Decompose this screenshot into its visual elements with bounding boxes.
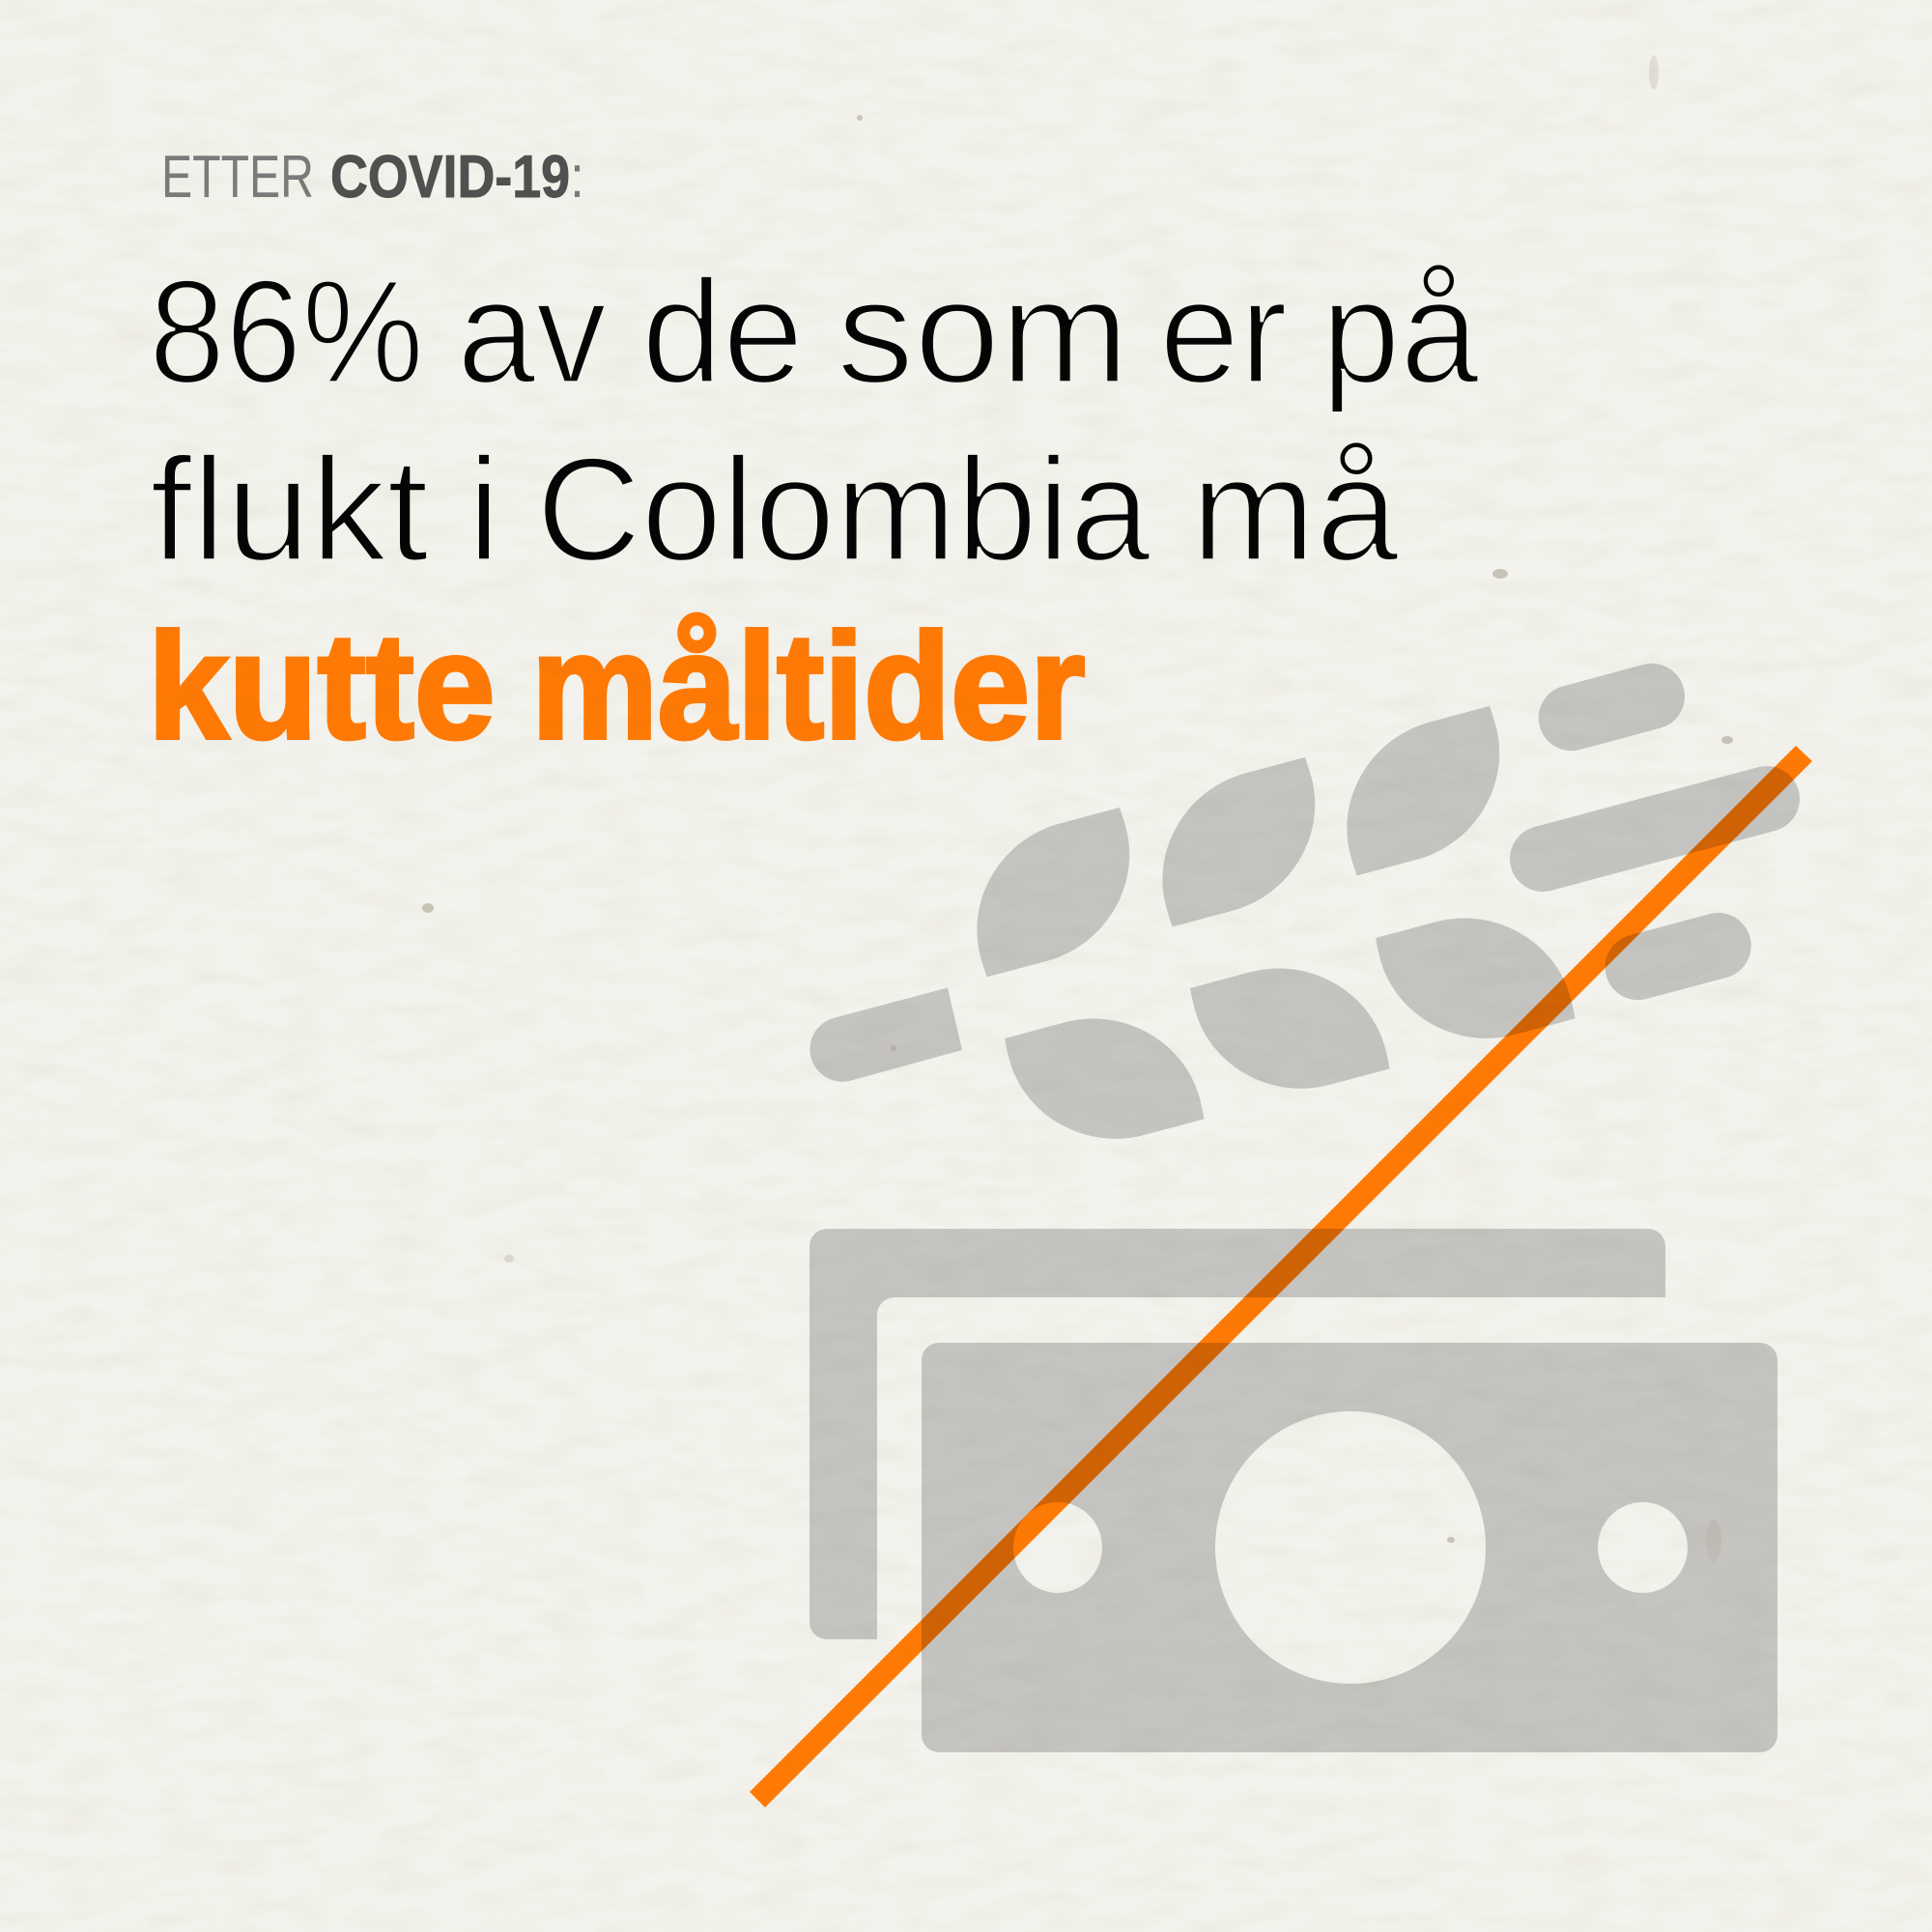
grain: lower leaf 2: [1189, 944, 1391, 1114]
kicker: etter covid-19: COVID-19: [330, 144, 570, 211]
headline line 2: i: [468, 427, 500, 592]
grain: upper leaf 3: [1322, 706, 1524, 876]
headline line 2: flukt: [150, 427, 429, 592]
headline line 2: [150, 427, 1400, 592]
grain: lower leaf 3: [1375, 894, 1577, 1064]
headline line 1: på: [1321, 249, 1480, 414]
headline line 1: 86%: [149, 249, 424, 414]
grain: upper leaf 2: [1138, 757, 1340, 927]
back banknote outline: [810, 1229, 1665, 1639]
grain: lower leaf 1: [1004, 994, 1206, 1164]
grain: short pill top: [1572, 696, 1652, 718]
headline line 2: Colombia: [536, 427, 1151, 592]
icon: grain: [810, 696, 1767, 1164]
headline line 1: som: [837, 249, 1129, 414]
grain: short pill bottom: [1638, 946, 1719, 967]
front banknote with three circles: [922, 1343, 1777, 1752]
orange strike-through line: [750, 746, 1812, 1807]
kicker: etter covid-19: :: [570, 144, 584, 211]
headline line 1: av: [457, 249, 607, 414]
grain: upper leaf 1: [952, 808, 1154, 978]
headline line 3: orange emphasis: kutte: [148, 603, 495, 771]
kicker: etter covid-19: [161, 144, 584, 211]
headline line 3: orange emphasis: måltider: [531, 603, 1086, 771]
grain: long pill: [1543, 799, 1767, 859]
icon: banknotes: [810, 1229, 1777, 1752]
headline line 1: er: [1159, 249, 1288, 414]
headline line 3: orange emphasis: [148, 603, 1086, 771]
grain: stem stub: [810, 987, 962, 1082]
headline line 1: [149, 249, 1480, 414]
kicker: etter covid-19: ETTER: [161, 144, 314, 211]
paper specks: [422, 55, 1733, 1562]
headline line 1: de: [641, 249, 804, 414]
headline: [148, 249, 1480, 771]
headline line 2: må: [1191, 427, 1400, 592]
